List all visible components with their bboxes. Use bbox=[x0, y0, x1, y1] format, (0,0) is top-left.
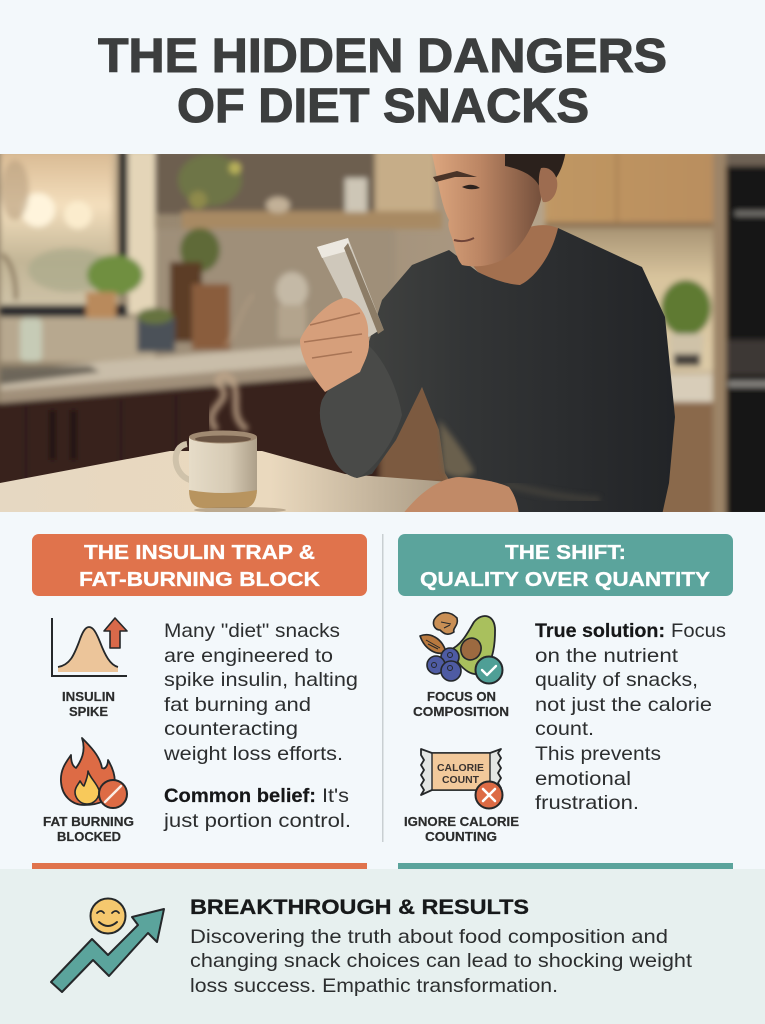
insulin trap heading: FAT-BURNING BLOCK bbox=[79, 568, 320, 591]
label: ignore calorie counting bbox=[404, 815, 519, 844]
shift heading bbox=[398, 534, 733, 596]
title: THE HIDDEN DANGERS bbox=[98, 30, 667, 83]
breakthrough body text bbox=[190, 926, 693, 997]
mug bbox=[176, 430, 286, 513]
label: focus on composition: FOCUS ON bbox=[427, 690, 496, 704]
shift body text: not just the calorie bbox=[535, 694, 712, 716]
shift body text: count. bbox=[535, 718, 594, 740]
breakthrough body text: changing snack choices can lead to shocking weight bbox=[190, 950, 693, 972]
icon: healthy foods with check bbox=[420, 613, 502, 684]
breakthrough heading: BREAKTHROUGH & RESULTS bbox=[190, 895, 529, 919]
steam bbox=[209, 338, 252, 432]
insulin trap body text bbox=[163, 620, 358, 765]
neck bbox=[470, 225, 558, 285]
shift body text: emotional bbox=[535, 768, 631, 790]
shift heading: THE SHIFT: bbox=[505, 541, 626, 564]
label: fat burning blocked: BLOCKED bbox=[57, 830, 121, 844]
breakthrough body text: loss success. Empathic transformation. bbox=[190, 975, 558, 997]
common belief text bbox=[163, 785, 351, 832]
label: focus on composition: COMPOSITION bbox=[413, 705, 509, 719]
insulin trap body text: counteracting bbox=[164, 718, 298, 740]
insulin trap body text: are engineered to bbox=[164, 645, 333, 667]
column divider bbox=[382, 534, 384, 842]
common belief text: Common belief: bbox=[164, 785, 316, 807]
icon: calorie count wrapper with cross: CALORIE bbox=[437, 762, 484, 774]
insulin trap body text: weight loss efforts. bbox=[163, 743, 343, 765]
wrapper and raised hand bbox=[300, 238, 384, 392]
insulin trap body text: fat burning and bbox=[164, 694, 311, 716]
shift heading: QUALITY OVER QUANTITY bbox=[420, 568, 710, 591]
shift body text: frustration. bbox=[535, 792, 639, 814]
panel: breakthrough and results bbox=[0, 869, 765, 1024]
shift body text: True solution: bbox=[535, 620, 665, 642]
breakthrough body text: Discovering the truth about food composition and bbox=[190, 926, 668, 948]
label: insulin spike: SPIKE bbox=[69, 705, 108, 719]
label: insulin spike bbox=[62, 690, 115, 719]
title: OF DIET SNACKS bbox=[177, 80, 589, 133]
panel: the shift bbox=[398, 534, 733, 844]
common belief text: just portion control. bbox=[163, 810, 351, 832]
label: fat burning blocked bbox=[43, 815, 134, 844]
shift body text: This prevents bbox=[535, 743, 661, 765]
shift body text: on the nutrient bbox=[535, 645, 679, 667]
man: sweater and arms bbox=[320, 150, 675, 515]
icon: rising arrow with smiley bbox=[51, 898, 164, 992]
insulin trap body text: spike insulin, halting bbox=[164, 669, 358, 691]
label: ignore calorie counting: COUNTING bbox=[425, 830, 497, 844]
icon: calorie count wrapper with cross bbox=[421, 749, 502, 808]
table bbox=[0, 451, 450, 512]
title bbox=[98, 30, 667, 133]
insulin trap heading: THE INSULIN TRAP & bbox=[84, 541, 315, 564]
label: focus on composition bbox=[413, 690, 509, 719]
icon: calorie count wrapper with cross: COUNT bbox=[442, 774, 480, 786]
icon: insulin spike chart bbox=[52, 618, 127, 676]
photo: man reading a diet snack wrapper in a kitchen bbox=[0, 150, 765, 517]
teal accent bar bbox=[398, 863, 733, 870]
label: insulin spike: INSULIN bbox=[62, 690, 115, 704]
label: ignore calorie counting: IGNORE CALORIE bbox=[404, 815, 519, 829]
shift body text: Focus bbox=[671, 620, 726, 642]
icon: fire blocked bbox=[61, 738, 127, 808]
face bbox=[432, 150, 541, 266]
panel: insulin trap bbox=[32, 534, 367, 844]
label: fat burning blocked: FAT BURNING bbox=[43, 815, 134, 829]
insulin trap heading bbox=[32, 534, 367, 596]
shift body text: quality of snacks, bbox=[535, 669, 698, 691]
shift body text bbox=[535, 620, 726, 814]
insulin trap body text: Many "diet" snacks bbox=[164, 620, 340, 642]
orange accent bar bbox=[32, 863, 367, 870]
hand on table bbox=[402, 477, 519, 515]
common belief text: It's bbox=[322, 785, 349, 807]
